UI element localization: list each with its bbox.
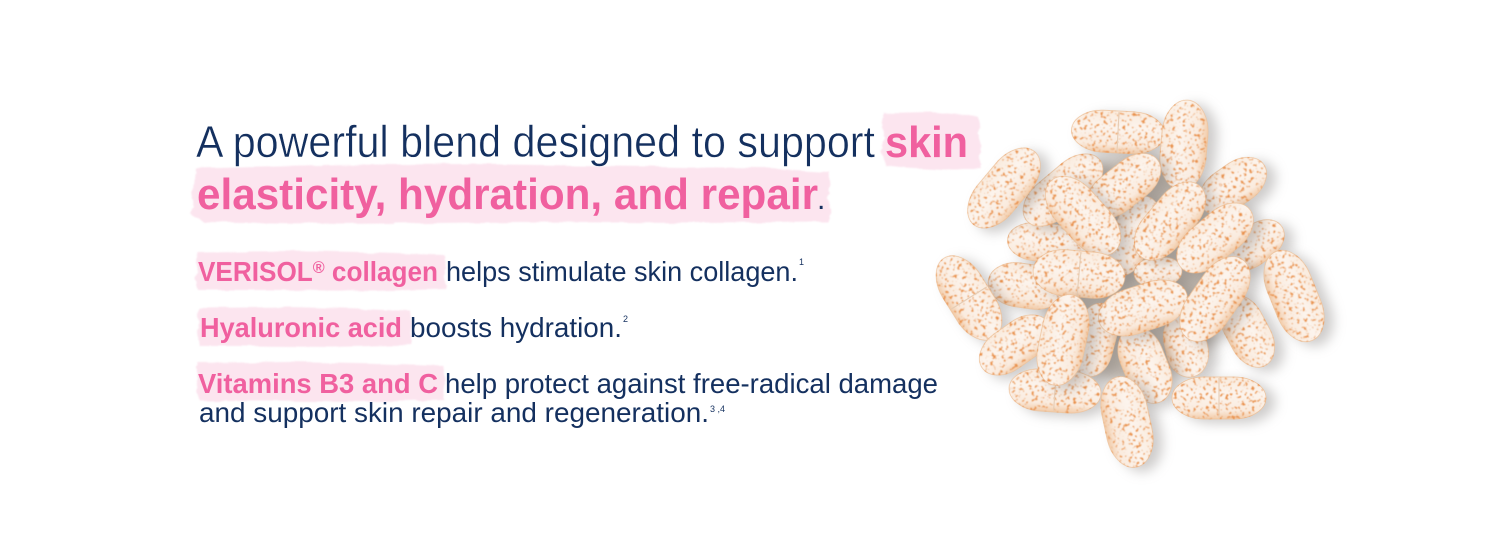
title emphasis: skin: skin <box>885 118 968 167</box>
title <box>196 118 968 219</box>
benefit: VERISOL collagen: collagen <box>325 256 438 287</box>
benefit: Vitamins B3 and C <box>198 368 938 428</box>
benefit: VERISOL collagen: ® <box>313 258 325 277</box>
title line two: elasticity, hydration, and repair <box>197 170 818 219</box>
benefit: VERISOL collagen: 1 <box>799 257 804 267</box>
benefit: Hyaluronic acid: boosts hydration. <box>410 312 622 343</box>
title line one: A powerful blend designed to support <box>196 118 876 167</box>
benefit: VERISOL collagen: VERISOL <box>198 256 319 287</box>
highlight: Vitamins B3 and C <box>196 362 445 402</box>
benefit: Vitamins B3 and C: help protect against free-radical damage <box>445 368 938 399</box>
benefit: Hyaluronic acid <box>200 312 628 343</box>
benefit: Vitamins B3 and C: Vitamins B3 and C <box>198 368 438 399</box>
highlight: Hyaluronic acid <box>197 307 412 347</box>
benefit: VERISOL collagen: helps stimulate skin collagen. <box>446 256 798 287</box>
highlight: skin <box>881 112 982 170</box>
benefit: VERISOL collagen <box>198 256 804 287</box>
highlight: elasticity, hydration, and repair <box>190 164 832 224</box>
benefit: Hyaluronic acid: Hyaluronic acid <box>200 312 402 343</box>
highlight: VERISOL collagen <box>195 251 447 291</box>
benefit: Hyaluronic acid: 2 <box>623 314 628 324</box>
benefit: Vitamins B3 and C: 3 ,4 <box>710 404 725 414</box>
title period: . <box>817 183 825 216</box>
image: pile of speckled tablets <box>925 98 1333 472</box>
benefit: Vitamins B3 and C: and support skin repair and regeneration. <box>199 397 709 428</box>
